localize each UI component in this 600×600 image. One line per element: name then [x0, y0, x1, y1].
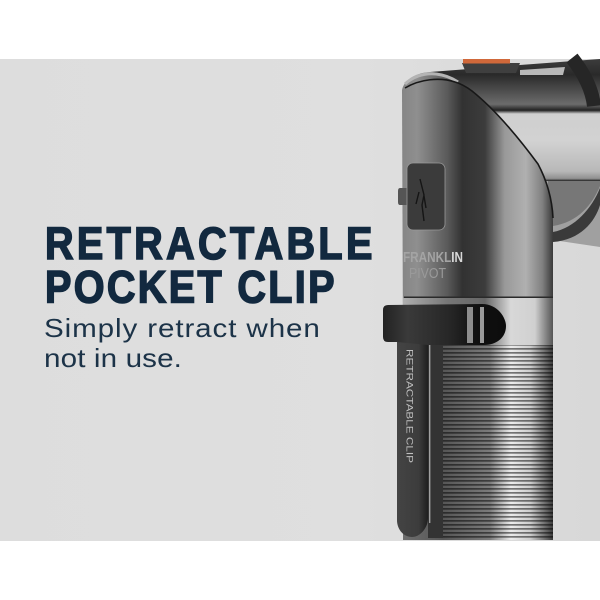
flashlight product illustration [383, 58, 600, 540]
description text: not in use. [44, 344, 182, 373]
heading: retractable pocket clip: RETRACTABLE [45, 219, 372, 269]
clip label: RETRACTABLE CLIP [404, 349, 414, 463]
description text [44, 314, 320, 373]
retractable clip [383, 304, 506, 537]
flashlight head [430, 59, 600, 181]
brand text on body: FRANKLIN [403, 250, 463, 266]
power button [462, 59, 520, 73]
body top cap highlight [405, 74, 458, 84]
clip shadow [428, 345, 443, 538]
brand text on body [403, 250, 463, 282]
body seam line [404, 296, 553, 298]
lanyard loop shape under head [540, 180, 600, 247]
brand text on body: PIVOT [409, 266, 446, 282]
strap loop [572, 58, 594, 106]
upper band [403, 298, 553, 345]
head top highlight [520, 67, 565, 75]
USB port cover [398, 163, 445, 230]
body seam [405, 79, 553, 218]
flashlight body [402, 72, 553, 345]
heading: retractable pocket clip [45, 219, 372, 312]
heading: retractable pocket clip: POCKET CLIP [45, 262, 335, 312]
ribbed grip [403, 345, 553, 540]
description text: Simply retract when [44, 314, 320, 343]
